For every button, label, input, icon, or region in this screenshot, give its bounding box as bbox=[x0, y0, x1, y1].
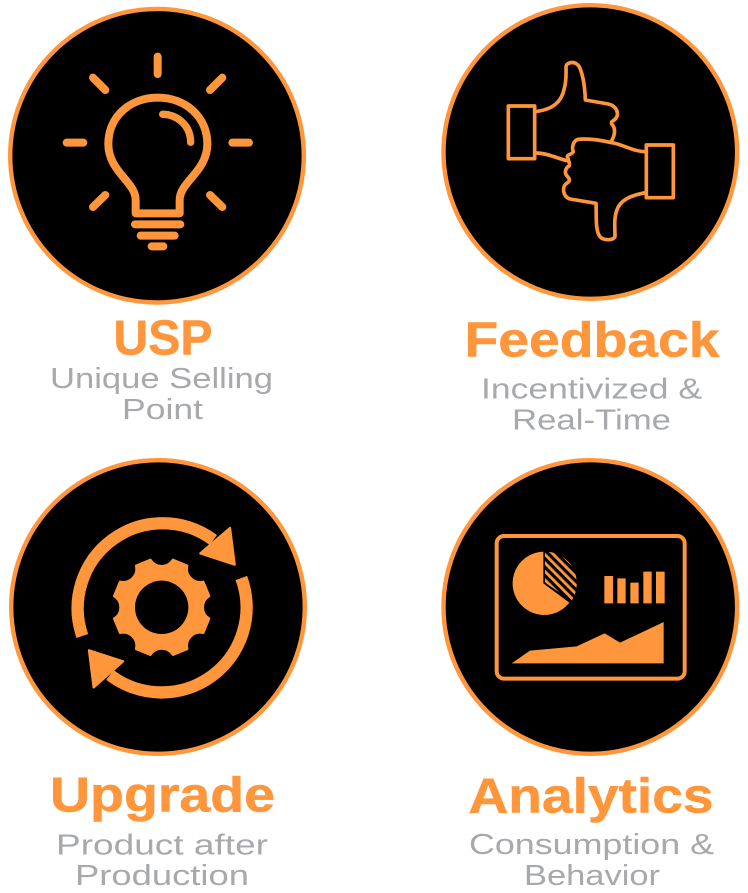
icon: analytics dashboard bbox=[497, 536, 685, 679]
heading: Analytics: Analytics bbox=[468, 770, 714, 824]
text: Incentivized and Real-Time bbox=[481, 373, 702, 436]
heading: Upgrade: Upgrade bbox=[50, 769, 275, 823]
dashboard frame bbox=[497, 536, 685, 679]
circle badge: USP bbox=[10, 9, 304, 302]
text: Incentivized and Real-Time: Incentivized & bbox=[481, 373, 702, 405]
heading: Feedback: Feedback bbox=[464, 314, 720, 368]
text: Unique Selling Point: Point bbox=[122, 394, 203, 426]
pie chart bbox=[513, 552, 577, 615]
bar chart bbox=[604, 572, 665, 603]
panel: Feedback bbox=[444, 5, 737, 436]
icon: thumbs up and thumbs down bbox=[508, 62, 673, 240]
text: Unique Selling Point: Unique Selling bbox=[50, 363, 273, 395]
panel: Analytics bbox=[444, 460, 737, 892]
text: Consumption and Behavior: Consumption & bbox=[469, 829, 714, 861]
area chart bbox=[512, 622, 664, 663]
circle badge: Feedback bbox=[444, 5, 737, 299]
panel: USP bbox=[10, 9, 304, 426]
text: Product after Production: Product after bbox=[56, 829, 269, 861]
circle badge: Upgrade bbox=[11, 460, 305, 754]
text: Product after Production bbox=[56, 829, 269, 892]
text: Consumption and Behavior bbox=[469, 829, 714, 892]
text: Product after Production: Production bbox=[75, 860, 249, 892]
text: Incentivized and Real-Time: Real-Time bbox=[512, 404, 671, 436]
text: Unique Selling Point bbox=[50, 363, 273, 426]
heading: USP: USP bbox=[114, 311, 212, 365]
icon: gear with circular arrows bbox=[78, 523, 247, 692]
icon: light bulb bbox=[67, 57, 249, 246]
panel: Upgrade bbox=[11, 460, 305, 892]
text: Consumption and Behavior: Behavior bbox=[524, 860, 661, 892]
circle badge: Analytics bbox=[444, 460, 737, 754]
